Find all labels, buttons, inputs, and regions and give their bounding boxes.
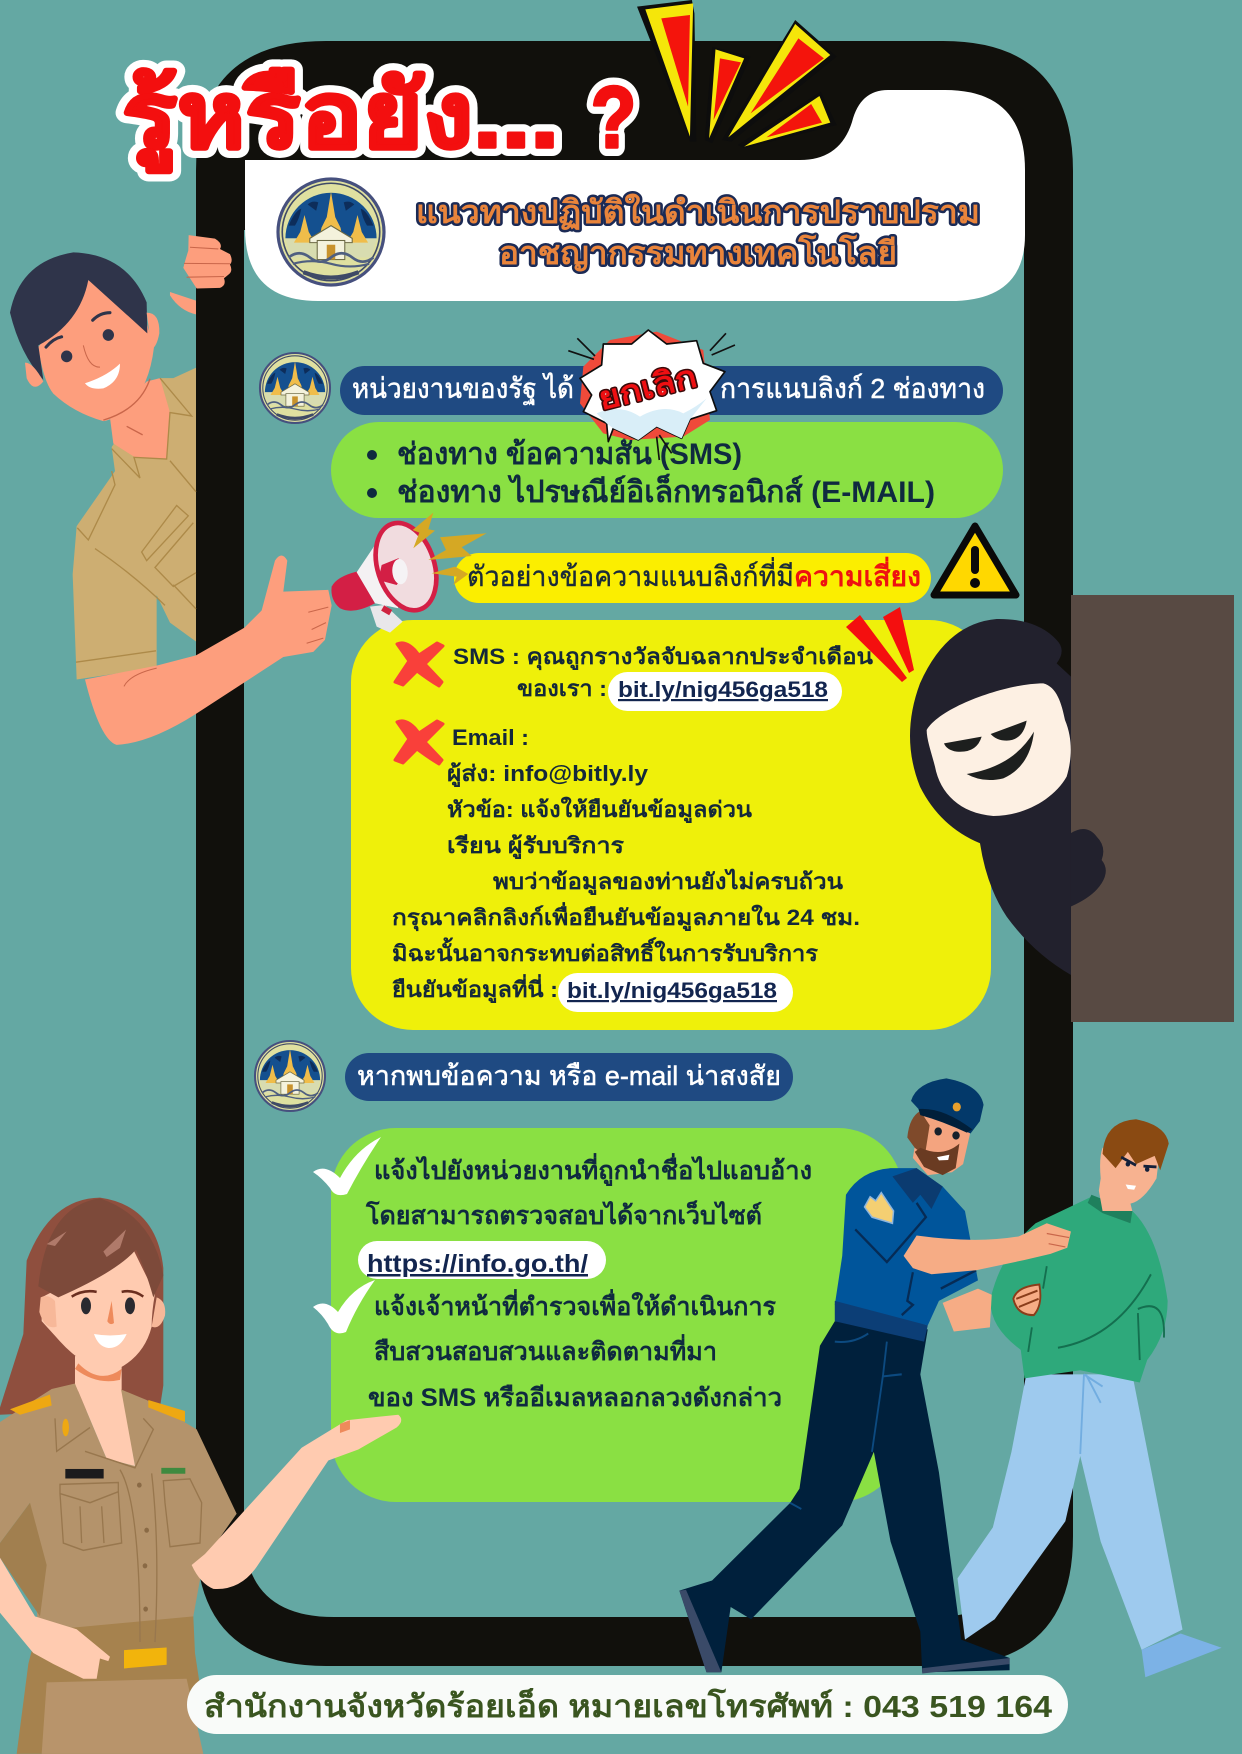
text: SMS example: SMS : คุณถูกรางวัลจับฉลากประจำเดือน xyxy=(453,644,873,671)
text: Email example: พบว่าข้อมูลของท่านยังไม่ครบถ้วน xyxy=(493,868,843,896)
icon: burst spikes xyxy=(637,0,837,148)
text: Email example xyxy=(392,725,860,1012)
text: Email example: ยืนยันข้อมูลที่นี่ : xyxy=(392,973,558,1004)
icon: check two xyxy=(313,1280,375,1333)
text: step two: สืบสวนสอบสวนและติดตามที่มา xyxy=(374,1334,717,1366)
icon: small seal two xyxy=(255,1041,325,1111)
text: Email example: Email : xyxy=(452,725,529,750)
text: SMS example: bit.ly/nig456ga518 xyxy=(618,677,828,702)
panel: channels list: ช่องทาง ไปรษณีย์อิเล็กทรอนิกส์ (E-MAIL) xyxy=(397,473,935,509)
text: Email example: เรียน ผู้รับบริการ xyxy=(447,833,624,860)
text: step two: แจ้งเจ้าหน้าที่ตำรวจเพื่อให้ดำเนินการ xyxy=(374,1289,777,1321)
character: man giving thumbs up xyxy=(10,235,332,745)
banner: risky link examples xyxy=(454,553,931,603)
text: SMS example xyxy=(453,644,873,711)
banner: risky link examples: ตัวอย่างข้อความแนบลิงก์ที่มี xyxy=(467,557,794,592)
icon: red cross one xyxy=(395,643,443,686)
title: รู้หรือยัง: รู้หรือยัง... xyxy=(122,65,559,173)
text: step one: โดยสามารถตรวจสอบได้จากเว็บไซต์ xyxy=(365,1200,762,1230)
text: Email example: กรุณาคลิกลิงก์เพื่อยืนยันข้อมูลภายใน 24 ชม. xyxy=(392,901,860,932)
text: step one: แจ้งไปยังหน่วยงานที่ถูกนำชื่อไปแอบอ้าง xyxy=(374,1153,812,1187)
heading: header text: แนวทางปฏิบัติในดำเนินการปราบปราม xyxy=(416,193,980,230)
text: Email example: bit.ly/nig456ga518 xyxy=(567,978,777,1003)
icon: cancel burst: ยกเลิก xyxy=(595,358,700,417)
panel: risky message examples xyxy=(351,620,991,1030)
character: arrested man xyxy=(958,1119,1222,1677)
text: step two: ของ SMS หรืออีเมลหลอกลวงดังกล่าว xyxy=(368,1384,782,1412)
panel: channels list: ช่องทาง ข้อความสั้น (SMS) xyxy=(397,431,742,471)
banner: suspicious message xyxy=(345,1053,793,1101)
icon: check one xyxy=(313,1137,381,1195)
icon: warning triangle xyxy=(934,526,1016,595)
phone frame xyxy=(196,41,1073,1666)
icon: large provincial seal xyxy=(278,179,384,285)
text: SMS example: ของเรา : xyxy=(517,676,607,701)
banner: risky link examples: ความเสี่ยง xyxy=(794,556,921,592)
text: step two xyxy=(368,1289,782,1412)
heading: header text: อาชญากรรมทางเทคโนโลยี xyxy=(499,234,897,272)
door xyxy=(1071,595,1234,1022)
banner: cancelled link channels: หน่วยงานของรัฐ ได้ xyxy=(352,373,574,405)
icon: red cross two xyxy=(395,721,443,764)
heading: header text xyxy=(416,193,980,272)
panel: channels list xyxy=(331,422,1003,518)
text: Email example: ผู้ส่ง: info@bitly.ly xyxy=(447,761,649,788)
banner: suspicious message: หากพบข้อความ หรือ e-mail น่าสงสัย xyxy=(357,1061,781,1091)
text: Email example: มิฉะนั้นอาจกระทบต่อสิทธิ์ในการรับบริการ xyxy=(392,937,818,966)
text: Email example: หัวข้อ: แจ้งให้ยืนยันข้อมูลด่วน xyxy=(447,796,752,824)
icon: red alert spikes xyxy=(846,607,914,682)
title: รู้หรือยัง: ? xyxy=(591,70,636,166)
icon: small seal one xyxy=(260,353,330,423)
title: รู้หรือยัง: ? xyxy=(591,70,636,166)
panel: what to do xyxy=(313,1128,903,1502)
header white panel xyxy=(245,90,1025,301)
character: masked scammer xyxy=(910,619,1106,975)
footer contact xyxy=(187,1675,1068,1734)
banner: cancelled link channels: การแนบลิงก์ 2 ช่องทาง xyxy=(720,373,985,404)
text: step one: https://info.go.th/ xyxy=(367,1250,588,1278)
banner: cancelled link channels xyxy=(340,366,1003,415)
icon: cancel burst xyxy=(568,330,735,460)
character: police officer xyxy=(679,1078,1071,1674)
footer contact: สำนักงานจังหวัดร้อยเอ็ด หมายเลขโทรศัพท์ : 043 519 164 xyxy=(204,1687,1053,1724)
icon: megaphone xyxy=(331,513,487,633)
text: step one xyxy=(358,1153,812,1279)
character: female officer xyxy=(0,1198,401,1754)
title: รู้หรือยัง: รู้หรือยัง... xyxy=(122,65,559,173)
